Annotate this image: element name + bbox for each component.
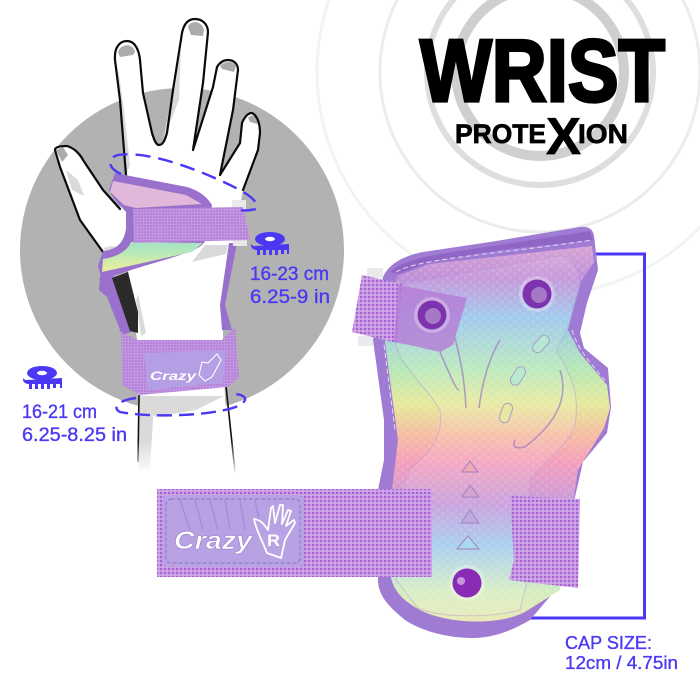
subtitle: ION: [578, 119, 628, 149]
right side strip: [220, 243, 237, 330]
plate pills: [498, 333, 551, 424]
wrist guard product: [157, 227, 611, 638]
measurement text: wrist: 16-21 cm: [22, 401, 97, 423]
strap label: [144, 350, 226, 390]
measurement text: wrist: 6.25-8.25 in: [22, 424, 127, 446]
plate groove lines: [440, 338, 563, 448]
hand shadows: [66, 50, 228, 470]
white strap clips: [358, 268, 383, 346]
dashed measuring loop: wrist: [117, 394, 245, 415]
rivet top left: [414, 297, 450, 333]
subtitle: [455, 108, 628, 166]
background concentric rings: [317, 0, 700, 295]
hand silhouette: [55, 19, 260, 472]
Crazy logo: Crazy: [174, 527, 253, 555]
letter R: R: [267, 531, 280, 550]
hand outline: [55, 19, 260, 252]
strap overlay patch: [394, 285, 467, 352]
label stripes: [180, 500, 260, 530]
fade at the base of the forearm: [125, 440, 250, 475]
right buckle strap: [509, 496, 580, 588]
lower wrist strap: [121, 327, 239, 395]
small top-left strap: [352, 275, 402, 343]
upper shell shading: [390, 231, 593, 274]
mesh texture: [385, 246, 610, 622]
subtitle: PROTE: [455, 119, 546, 149]
stitching: [384, 240, 606, 430]
measurement text: hand: 6.25-9 in: [250, 286, 330, 308]
long strap rubber label: [162, 495, 304, 567]
title: [420, 21, 665, 166]
rivet top right: [519, 276, 555, 312]
dashed measuring loop: hand: [110, 154, 257, 210]
small pad lower mesh: [102, 242, 203, 272]
cap size label: [565, 632, 678, 673]
forearm outlines: [138, 386, 235, 472]
grey circle behind the hand: [20, 88, 344, 412]
upper strap on the hand: [133, 207, 250, 243]
measurement text: hand: [250, 263, 330, 308]
measurement text: hand: 16-23 cm: [250, 263, 329, 285]
rivet bottom: [449, 565, 485, 601]
strap label: Crazy: [150, 369, 198, 383]
white strap clips: [232, 200, 247, 246]
cap size label: 12cm / 4.75in: [565, 652, 678, 673]
small wrist guard pad: [98, 173, 212, 280]
plate triangles: [457, 461, 479, 549]
icon: tape measure (wrist): [23, 366, 62, 389]
long strap: [157, 489, 432, 577]
measurement text: wrist: [22, 401, 127, 446]
hand illustration with wrist guard: [55, 19, 260, 475]
rainbow mesh: [385, 246, 610, 622]
fingernails: [56, 22, 258, 162]
clear plate: [396, 256, 580, 616]
subtitle: X: [546, 108, 581, 166]
black mesh lining: [112, 272, 138, 333]
cap size label: CAP SIZE:: [565, 632, 652, 653]
measurement bracket: [530, 254, 644, 618]
icon: hand logo: [254, 505, 295, 558]
small pad upper mesh: [110, 181, 202, 208]
purple side strip: [99, 272, 134, 335]
icon: tape measure (hand): [251, 232, 289, 255]
guard shell outline: [373, 227, 611, 638]
title: WRIST: [420, 21, 665, 120]
